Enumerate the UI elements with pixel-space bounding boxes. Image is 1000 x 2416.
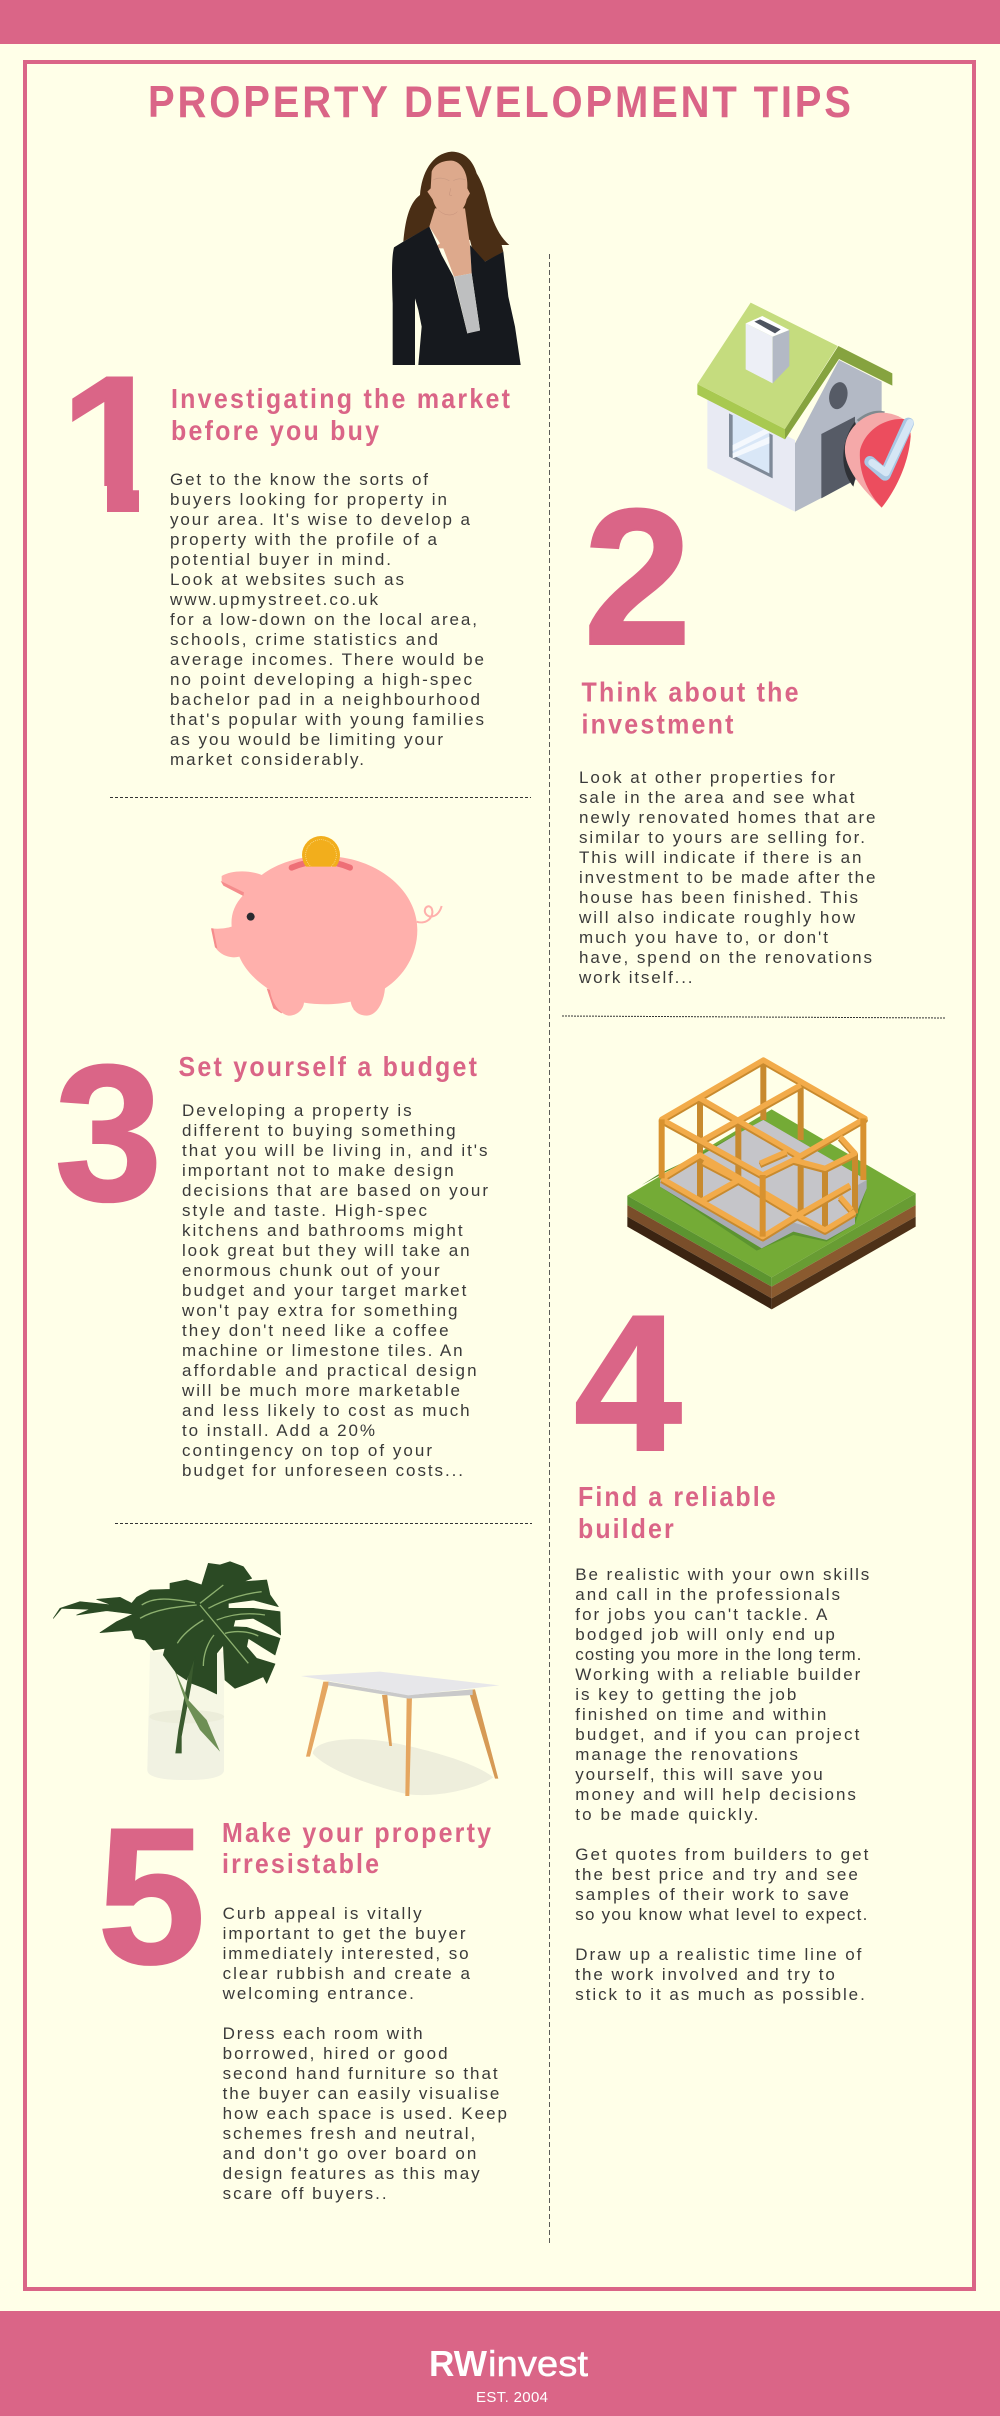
- body text 1: market considerably.: [170, 750, 364, 769]
- body text 4: stick to it as much as possible.: [575, 1985, 865, 2004]
- icon: monstera leaf: [53, 1562, 281, 1753]
- step 4: [574, 1275, 869, 2004]
- body text 3: will be much more marketable: [181, 1381, 460, 1400]
- footer banner: [0, 2311, 1000, 2416]
- body text 4: samples of their work to save: [575, 1885, 849, 1904]
- heading 4: Find a reliable: [578, 1481, 776, 1512]
- body text 2: house has been finished. This: [579, 888, 858, 907]
- title: PROPERTY DEVELOPMENT TIPS: [148, 77, 851, 126]
- step 1: [72, 376, 510, 768]
- body text 4: costing you more in the long term.: [575, 1645, 861, 1664]
- top banner: [0, 0, 1000, 44]
- body text 5: immediately interested, so: [223, 1944, 469, 1963]
- body text 3: [181, 1101, 488, 1480]
- body text 1: www.upmystreet.co.uk: [169, 590, 378, 609]
- body text 3: different to buying something: [182, 1121, 456, 1140]
- body text 5: the buyer can easily visualise: [223, 2084, 499, 2103]
- body text 1: schools, crime statistics and: [170, 630, 438, 649]
- body text 1: average incomes. There would be: [170, 650, 484, 669]
- heading 3: Set yourself a budget: [178, 1051, 477, 1082]
- number 1: 1: [60, 336, 168, 553]
- body text 1: for a low-down on the local area,: [170, 610, 477, 629]
- logo: [429, 2343, 588, 2406]
- number 5: 5: [98, 1788, 205, 2005]
- body text 5: borrowed, hired or good: [223, 2044, 448, 2063]
- heading 1: before you buy: [171, 415, 379, 446]
- body text 1: bachelor pad in a neighbourhood: [170, 690, 480, 709]
- body text 3: they don't need like a coffee: [182, 1321, 449, 1340]
- heading 2: Think about the: [582, 676, 798, 708]
- body text 4: Draw up a realistic time line of: [575, 1945, 862, 1964]
- body text 5: Dress each room with: [223, 2024, 423, 2043]
- body text 4: the best price and try and see: [575, 1865, 858, 1884]
- body text 3: won't pay extra for something: [181, 1301, 458, 1320]
- body text 3: enormous chunk out of your: [182, 1261, 440, 1280]
- body text 5: second hand furniture so that: [223, 2064, 498, 2083]
- body text 4: Working with a reliable builder: [575, 1665, 861, 1684]
- body text 1: Get to the know the sorts of: [170, 470, 428, 489]
- body text 5: how each space is used. Keep: [223, 2104, 507, 2123]
- heading 1: Investigating the market: [171, 383, 510, 414]
- body text 2: [578, 768, 876, 987]
- number 3: 3: [54, 1025, 162, 1242]
- illustration: plant in vase and table: [53, 1562, 499, 1796]
- body text 4: finished on time and within: [575, 1705, 826, 1724]
- heading 5: irresistable: [222, 1848, 379, 1879]
- body text 2: similar to yours are selling for.: [579, 828, 865, 847]
- body text 4: yourself, this will save you: [575, 1765, 823, 1784]
- logo: invest: [488, 2343, 588, 2384]
- body text 2: will also indicate roughly how: [578, 908, 856, 927]
- body text 3: Developing a property is: [182, 1101, 412, 1120]
- step 5: [98, 1788, 507, 2203]
- body text 1: buyers looking for property in: [170, 490, 447, 509]
- heading 5: [222, 1817, 491, 1879]
- body text 2: newly renovated homes that are: [579, 808, 876, 827]
- body text 1: no point developing a high-spec: [170, 670, 472, 689]
- body text 5: clear rubbish and create a: [223, 1964, 471, 1983]
- body text 2: much you have to, or don't: [579, 928, 828, 947]
- step 2: [578, 469, 876, 987]
- body text 5: [222, 1904, 507, 2203]
- body text 3: affordable and practical design: [182, 1361, 477, 1380]
- heading 4: [578, 1481, 776, 1544]
- body text 1: potential buyer in mind.: [170, 550, 391, 569]
- body text 3: and less likely to cost as much: [182, 1401, 470, 1420]
- body text 4: budget, and if you can project: [575, 1725, 860, 1744]
- body text 2: Look at other properties for: [579, 768, 835, 787]
- body text 2: work itself...: [578, 968, 692, 987]
- logo: EST. 2004: [476, 2389, 548, 2406]
- body text 3: decisions that are based on your: [182, 1181, 488, 1200]
- body text 2: This will indicate if there is an: [579, 848, 862, 867]
- body text 5: and don't go over board on: [223, 2144, 476, 2163]
- body text 3: important not to make design: [182, 1161, 454, 1180]
- heading 2: investment: [582, 708, 734, 740]
- number 4: 4: [574, 1275, 682, 1492]
- body text 1: as you would be limiting your: [170, 730, 443, 749]
- body text 1: property with the profile of a: [170, 530, 438, 549]
- icon: table: [301, 1672, 499, 1796]
- body text 5: scare off buyers..: [223, 2184, 387, 2203]
- heading 5: Make your property: [222, 1817, 491, 1848]
- body text 3: look great but they will take an: [182, 1241, 470, 1260]
- body text 1: your area. It's wise to develop a: [170, 510, 471, 529]
- body text 3: style and taste. High-spec: [182, 1201, 428, 1220]
- body text 4: [575, 1565, 869, 2004]
- heading 1: [171, 383, 510, 446]
- body text 5: Curb appeal is vitally: [223, 1904, 422, 1923]
- body text 4: money and will help decisions: [575, 1785, 856, 1804]
- illustration: businesswoman: [392, 152, 521, 365]
- body text 3: contingency on top of your: [182, 1441, 432, 1460]
- icon: vase: [147, 1652, 224, 1780]
- body text 4: the work involved and try to: [575, 1965, 835, 1984]
- body text 3: machine or limestone tiles. An: [182, 1341, 463, 1360]
- body text 3: budget and your target market: [182, 1281, 467, 1300]
- body text 2: investment to be made after the: [579, 868, 876, 887]
- logo: RW: [429, 2343, 487, 2384]
- body text 4: Be realistic with your own skills: [575, 1565, 869, 1584]
- body text 2: have, spend on the renovations: [579, 948, 872, 967]
- illustration: house with check badge: [697, 303, 911, 512]
- body text 5: welcoming entrance.: [222, 1984, 414, 2003]
- body text 3: that you will be living in, and it's: [182, 1141, 488, 1160]
- body text 4: so you know what level to expect.: [575, 1905, 867, 1924]
- body text 3: budget for unforeseen costs...: [182, 1461, 463, 1480]
- body text 3: kitchens and bathrooms might: [182, 1221, 463, 1240]
- body text 2: sale in the area and see what: [579, 788, 855, 807]
- body text 4: and call in the professionals: [575, 1585, 840, 1604]
- body text 4: manage the renovations: [575, 1745, 798, 1764]
- body text 4: for jobs you can't tackle. A: [575, 1605, 828, 1624]
- step 3: [54, 1025, 488, 1480]
- illustration: piggy bank: [211, 836, 442, 1016]
- body text 5: important to get the buyer: [223, 1924, 466, 1943]
- heading 4: builder: [578, 1513, 674, 1544]
- body text 5: schemes fresh and neutral,: [223, 2124, 475, 2143]
- body text 4: bodged job will only end up: [575, 1625, 835, 1644]
- body text 4: Get quotes from builders to get: [575, 1845, 869, 1864]
- body text 1: Look at websites such as: [170, 570, 404, 589]
- body text 4: is key to getting the job: [575, 1685, 796, 1704]
- vertical and horizontal dividers: [110, 254, 945, 2245]
- body text 3: to install. Add a 20%: [182, 1421, 375, 1440]
- body text 4: to be made quickly.: [575, 1805, 758, 1824]
- heading 2: [582, 676, 798, 740]
- number 2: 2: [584, 469, 691, 686]
- illustration: timber house frame on grass: [627, 1060, 916, 1309]
- body text 1: that's popular with young families: [170, 710, 484, 729]
- body text 1: [169, 470, 484, 769]
- body text 5: design features as this may: [223, 2164, 480, 2183]
